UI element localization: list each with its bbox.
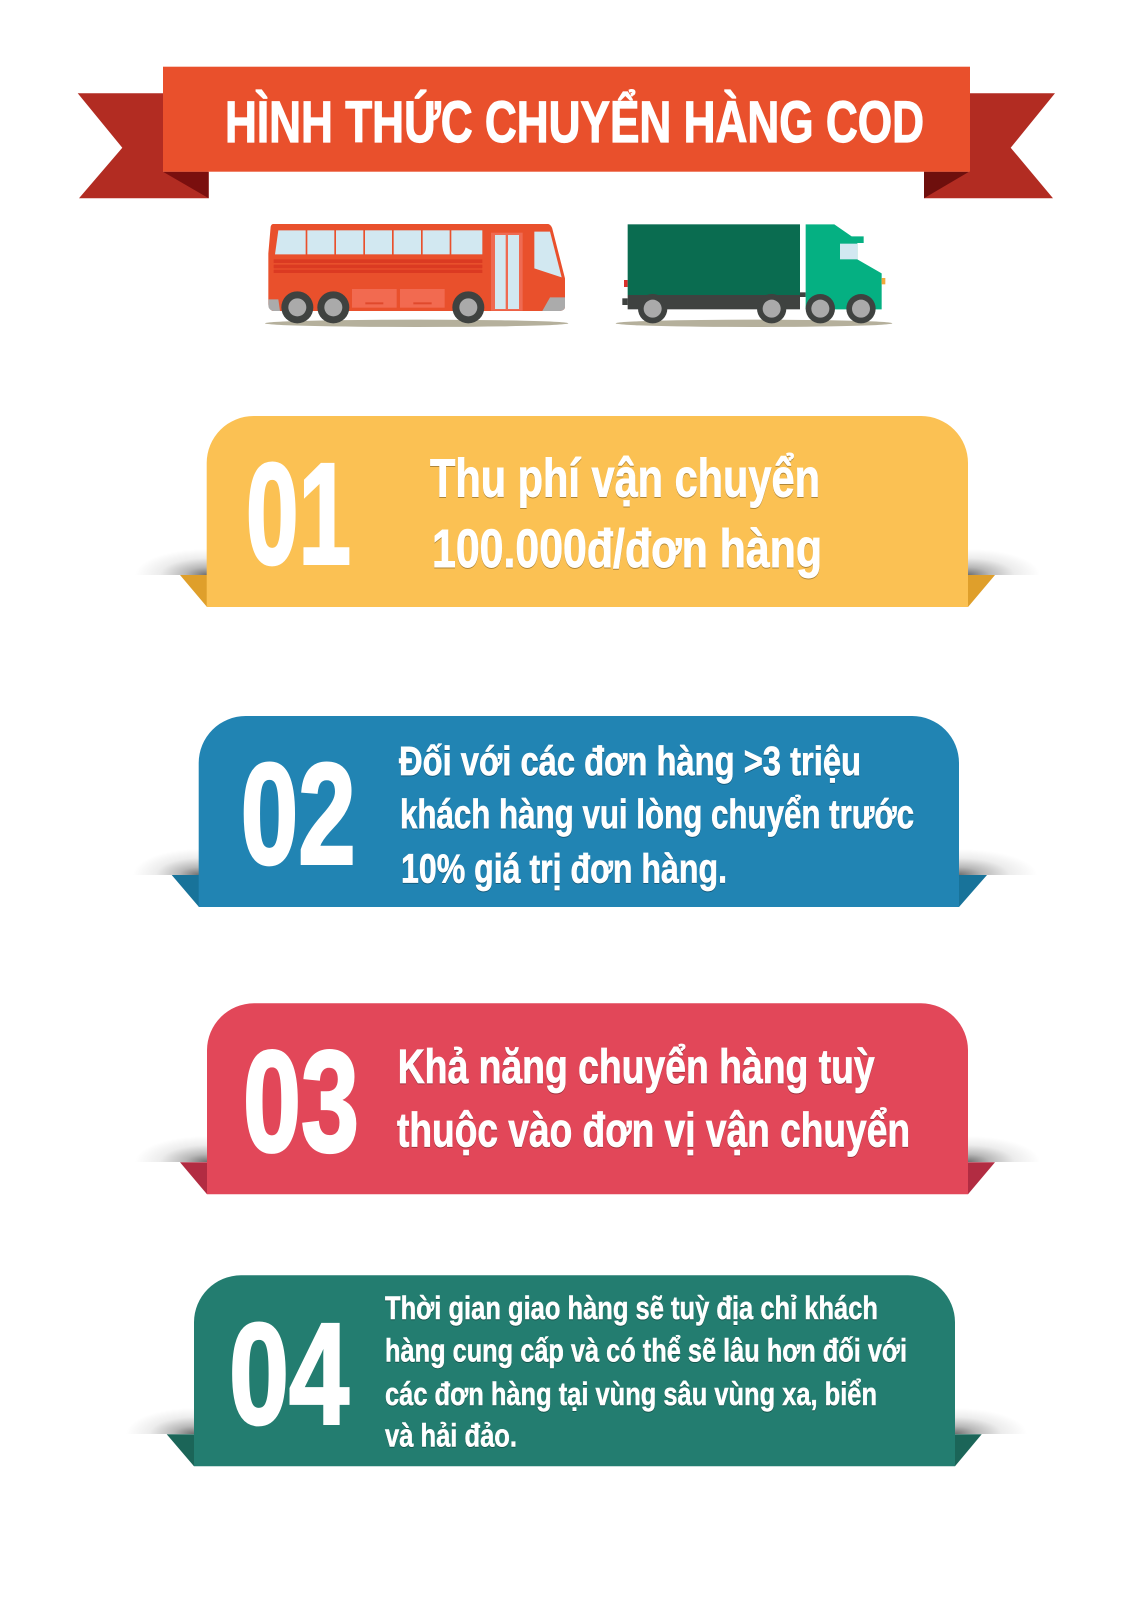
text: item 04: các đơn hàng tại vùng sâu vùng xa, biển: [385, 1376, 877, 1412]
text: item 01: 100.000đ/đơn hàng: [432, 519, 822, 579]
icon: red bus: [265, 224, 568, 327]
text: item 02: [399, 738, 914, 892]
text: item 03: thuộc vào đơn vị vận chuyển: [397, 1105, 910, 1158]
text: item 04: [385, 1290, 907, 1454]
text: item 02: 10% giá trị đơn hàng.: [401, 846, 727, 892]
text: item 04: và hải đảo.: [385, 1418, 517, 1454]
text: item 02: khách hàng vui lòng chuyển trước: [400, 791, 914, 837]
text: item 04: hàng cung cấp và có thể sẽ lâu hơn đối với: [385, 1333, 907, 1369]
text: item 04: Thời gian giao hàng sẽ tuỳ địa chỉ khách: [385, 1290, 878, 1326]
number 01: 01: [246, 434, 351, 594]
text: item 03: Khả năng chuyển hàng tuỳ: [398, 1041, 875, 1094]
panel: item 01: [135, 416, 1040, 607]
text: item 03: [397, 1041, 910, 1158]
title ribbon banner: [78, 67, 1055, 198]
text: item 01: [430, 449, 822, 579]
number 03: 03: [243, 1021, 359, 1182]
title: HÌNH THỨC CHUYỂN HÀNG COD: [225, 90, 924, 155]
panel: item 03: [135, 1003, 1040, 1194]
text: item 02: Đối với các đơn hàng >3 triệu: [399, 738, 861, 784]
ribbon left tail: [78, 93, 209, 198]
ribbon right tail: [924, 93, 1055, 198]
number 02: 02: [241, 734, 356, 894]
panel: item 02: [133, 716, 1037, 907]
panel: item 04: [126, 1275, 1027, 1466]
text: item 01: Thu phí vận chuyển: [430, 449, 820, 509]
icon: green truck: [616, 224, 892, 327]
number 04: 04: [229, 1294, 349, 1454]
